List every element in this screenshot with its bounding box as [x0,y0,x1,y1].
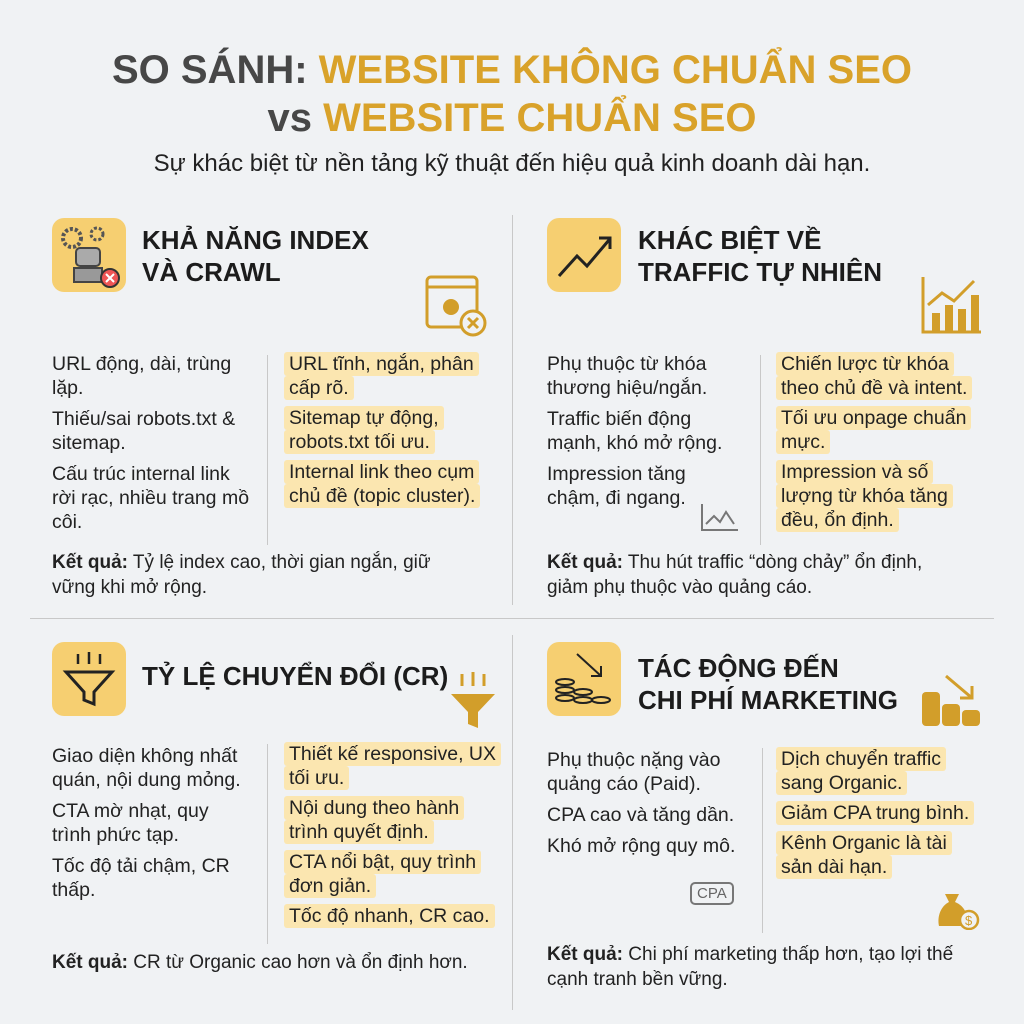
icon: bar chart [922,277,981,334]
result: Kết quả: Chi phí marketing thấp hơn, tạo lợi thế cạnh tranh bền vững. [547,944,953,990]
left column: bad: Tốc độ tải chậm, CR thấp. [52,855,230,901]
right column: good: Sitemap tự động, robots.txt tối ưu. [289,407,439,453]
heading: CHI PHÍ MARKETING [638,685,898,715]
heading: TÁC ĐỘNG ĐẾN [638,653,839,683]
panel: conversion [52,642,501,973]
left column: bad: Khó mở rộng quy mô. [547,835,735,857]
heading [638,653,898,715]
heading [142,225,369,287]
left column: bad [52,745,241,901]
title: vs WEBSITE CHUẨN SEO [268,96,756,140]
icon: coins down [547,642,621,716]
panel: index crawl [52,218,486,598]
result: Kết quả: Thu hút traffic “dòng chảy” ổn định, giảm phụ thuộc vào quảng cáo. [547,552,922,598]
heading: KHẢ NĂNG INDEX [142,225,369,255]
left column: bad: CPA cao và tăng dần. [547,804,734,826]
right column: good: Nội dung theo hành trình quyết định. [289,797,459,843]
icon: money bag [938,894,980,930]
left column: bad: Traffic biến động mạnh, khó mở rộng. [547,408,722,454]
result: Kết quả: CR từ Organic cao hơn và ổn định hơn. [52,952,468,973]
right column: good: Giảm CPA trung bình. [781,802,969,824]
right column: good: Tối ưu onpage chuẩn mực. [781,407,966,453]
right column: good [284,352,480,508]
icon: browser bug [426,276,486,336]
left column: bad [52,353,249,533]
heading: TRAFFIC TỰ NHIÊN [638,257,882,287]
right column: good: Thiết kế responsive, UX tối ưu. [289,743,496,789]
right column: good [776,352,972,532]
panel: marketing cost [547,642,980,990]
right column: good: URL tĩnh, ngắn, phân cấp rõ. [289,353,474,399]
right column: good: Kênh Organic là tài sản dài hạn. [781,832,947,878]
right column: good: Impression và số lượng từ khóa tăng đều, ổn định. [781,461,948,531]
icon: gold coins [922,674,980,726]
icon: funnel [52,642,126,716]
heading: VÀ CRAWL [142,257,281,287]
left column: bad: Thiếu/sai robots.txt & sitemap. [52,408,235,454]
title [112,47,912,140]
title: SO SÁNH: WEBSITE KHÔNG CHUẨN SEO [112,48,912,92]
result: Kết quả: Tỷ lệ index cao, thời gian ngắn, giữ vững khi mở rộng. [52,552,431,598]
left column: bad: Impression tăng chậm, đi ngang. [547,463,686,509]
left column: bad [547,749,735,857]
icon: CPA click [690,882,734,905]
panel: traffic [547,218,981,598]
icon: CPA click: CPA [697,885,727,902]
heading [638,225,882,287]
right column: good: CTA nổi bật, quy trình đơn giản. [289,851,476,897]
right column: good: Internal link theo cụm chủ đề (topic cluster). [289,461,475,507]
heading: KHÁC BIỆT VỀ [638,225,821,255]
left column: bad: Phụ thuộc từ khóa thương hiệu/ngắn. [547,353,707,399]
left column: bad: Cấu trúc internal link rời rạc, nhiều trang mồ côi. [52,463,249,533]
icon: trend arrow [547,218,621,292]
left column: bad: Giao diện không nhất quán, nội dung mỏng. [52,745,241,791]
right column: good [776,747,974,879]
right column: good: Dịch chuyển traffic sang Organic. [781,748,941,794]
subtitle: Sự khác biệt từ nền tảng kỹ thuật đến hiệu quả kinh doanh dài hạn. [154,150,870,177]
icon: flat line chart [701,504,738,531]
right column: good: Tốc độ nhanh, CR cao. [289,905,490,927]
icon: money bag: $ [965,913,973,928]
left column: bad: URL động, dài, trùng lặp. [52,353,231,399]
left column: bad: Phụ thuộc nặng vào quảng cáo (Paid). [547,749,720,795]
heading: TỶ LỆ CHUYỂN ĐỔI (CR) [142,661,448,691]
left column: bad [547,353,722,509]
left column: bad: CTA mờ nhạt, quy trình phức tạp. [52,800,209,846]
icon: gold funnel [451,672,495,728]
right column: good: Chiến lược từ khóa theo chủ đề và intent. [781,353,967,399]
right column: good [284,742,501,928]
icon: robot gears [52,218,126,292]
